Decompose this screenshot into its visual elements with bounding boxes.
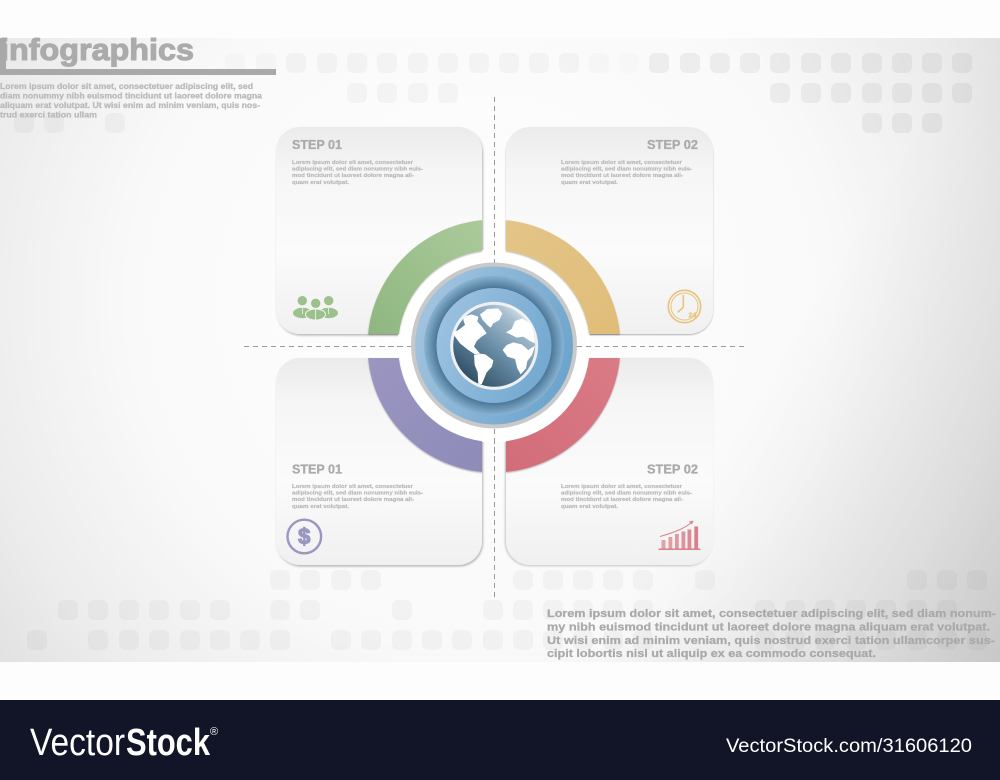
card text: [561, 160, 692, 186]
heading: step 02: STEP 02: [647, 462, 698, 476]
arc segment: purple: [368, 358, 482, 472]
card background: [276, 358, 482, 565]
card text: quam erat volutpat.: [561, 180, 618, 186]
bottom paragraph: [547, 608, 996, 660]
intro paragraph: [0, 81, 262, 120]
globe: [453, 305, 535, 387]
card text: [561, 484, 692, 510]
bottom paragraph: Ut wisi enim ad minim veniam, quis nostrud exerci tation ullamcorper sus-: [547, 635, 995, 647]
card text: Lorem ipsum dolor sit amet, consectetuer: [561, 160, 683, 166]
title block: [0, 32, 276, 120]
panel: step 01 bottom left: [276, 358, 482, 565]
panel: step 02 top right: [506, 127, 713, 334]
icon: dollar coin: $: [298, 524, 310, 549]
image background panel: [0, 38, 1000, 662]
card text: quam erat volutpat.: [561, 504, 618, 510]
footer banner: [0, 700, 1000, 780]
bottom paragraph: Lorem ipsum dolor sit amet, consectetuer adipiscing elit, sed diam nonum-: [547, 608, 996, 620]
background pattern of rounded squares: [14, 53, 987, 650]
intro paragraph: trud exerci tation ullam: [0, 110, 97, 120]
icon: people group: [293, 296, 338, 320]
shaded middle ring: [424, 276, 564, 416]
icon: dollar coin: [288, 520, 321, 553]
card text: Lorem ipsum dolor sit amet, consectetuer: [292, 484, 414, 490]
logo: VectorStock: Vector: [30, 722, 125, 764]
intro paragraph: aliquam erat volutpat. Ut wisi enim ad minim veniam, quis nos-: [0, 100, 260, 110]
inner blue ring: [436, 288, 552, 403]
central globe badge: [411, 262, 577, 428]
card text: mod tincidunt ut laoreet dolore magna ali-: [561, 497, 683, 503]
card text: adipiscing elit, sed diam nonummy nibh euis-: [292, 491, 423, 497]
dashed guide lines: [244, 97, 744, 600]
card text: [292, 484, 423, 510]
card text: adipiscing elit, sed diam nonummy nibh euis-: [292, 167, 423, 173]
card text: adipiscing elit, sed diam nonummy nibh euis-: [561, 491, 692, 497]
footer background: [0, 700, 1000, 780]
logo: VectorStock: Stock: [126, 722, 211, 764]
white gap: vertical connector: [482, 250, 506, 442]
intro paragraph: Lorem ipsum dolor sit amet, consectetuer adipiscing elit, sed: [0, 81, 253, 91]
card background: [506, 127, 713, 334]
bottom right shading: [0, 38, 1000, 662]
title underline bar: [0, 38, 276, 75]
card text: Lorem ipsum dolor sit amet, consectetuer: [292, 160, 414, 166]
grey outer ring: [411, 262, 577, 428]
arc segment: green: [368, 220, 482, 334]
panel: step 02 bottom right: [506, 358, 713, 565]
icon: 24 hour clock: [668, 290, 701, 323]
globe continents: [453, 308, 535, 384]
intro paragraph: diam nonummy nibh euismod tincidunt ut laoreet dolore magna: [0, 90, 262, 100]
footer image id: VectorStock.com/31606120: [726, 736, 972, 757]
heading: step 01: STEP 01: [292, 462, 342, 476]
card text: mod tincidunt ut laoreet dolore magna ali-: [561, 173, 683, 179]
card text: mod tincidunt ut laoreet dolore magna ali-: [292, 497, 414, 503]
card text: mod tincidunt ut laoreet dolore magna ali-: [292, 173, 414, 179]
icon: 24 hour clock: 24: [688, 312, 696, 320]
heading: step 02: STEP 02: [647, 138, 698, 152]
logo: VectorStock: ®: [210, 726, 218, 738]
arc segment: red: [506, 358, 620, 472]
bottom paragraph: cipit lobortis nisl ut aliquip ex ea commodo consequat.: [547, 648, 876, 660]
logo: VectorStock: [30, 722, 218, 764]
outer blue ring: [415, 266, 573, 424]
white gap: horizontal connector: [398, 334, 590, 358]
panel: step 01 top left: [276, 127, 482, 334]
card text: quam erat volutpat.: [292, 180, 349, 186]
card text: adipiscing elit, sed diam nonummy nibh euis-: [561, 167, 692, 173]
bottom paragraph: my nibh euismod tincidunt ut laoreet dolore magna aliquam erat volutpat.: [547, 622, 990, 634]
card text: Lorem ipsum dolor sit amet, consectetuer: [561, 484, 683, 490]
card background: [506, 358, 713, 565]
white ring behind the centre: [398, 250, 590, 442]
heading: step 01: STEP 01: [292, 138, 342, 152]
arc segment: orange: [506, 220, 620, 334]
white globe border: [450, 302, 538, 390]
card text: quam erat volutpat.: [292, 504, 349, 510]
dashes across the white gap: [380, 232, 608, 460]
card text: [292, 160, 423, 186]
icon: rising bar chart: [658, 520, 700, 550]
heading: infographics: infographics: [0, 32, 194, 67]
card background: [276, 127, 482, 334]
